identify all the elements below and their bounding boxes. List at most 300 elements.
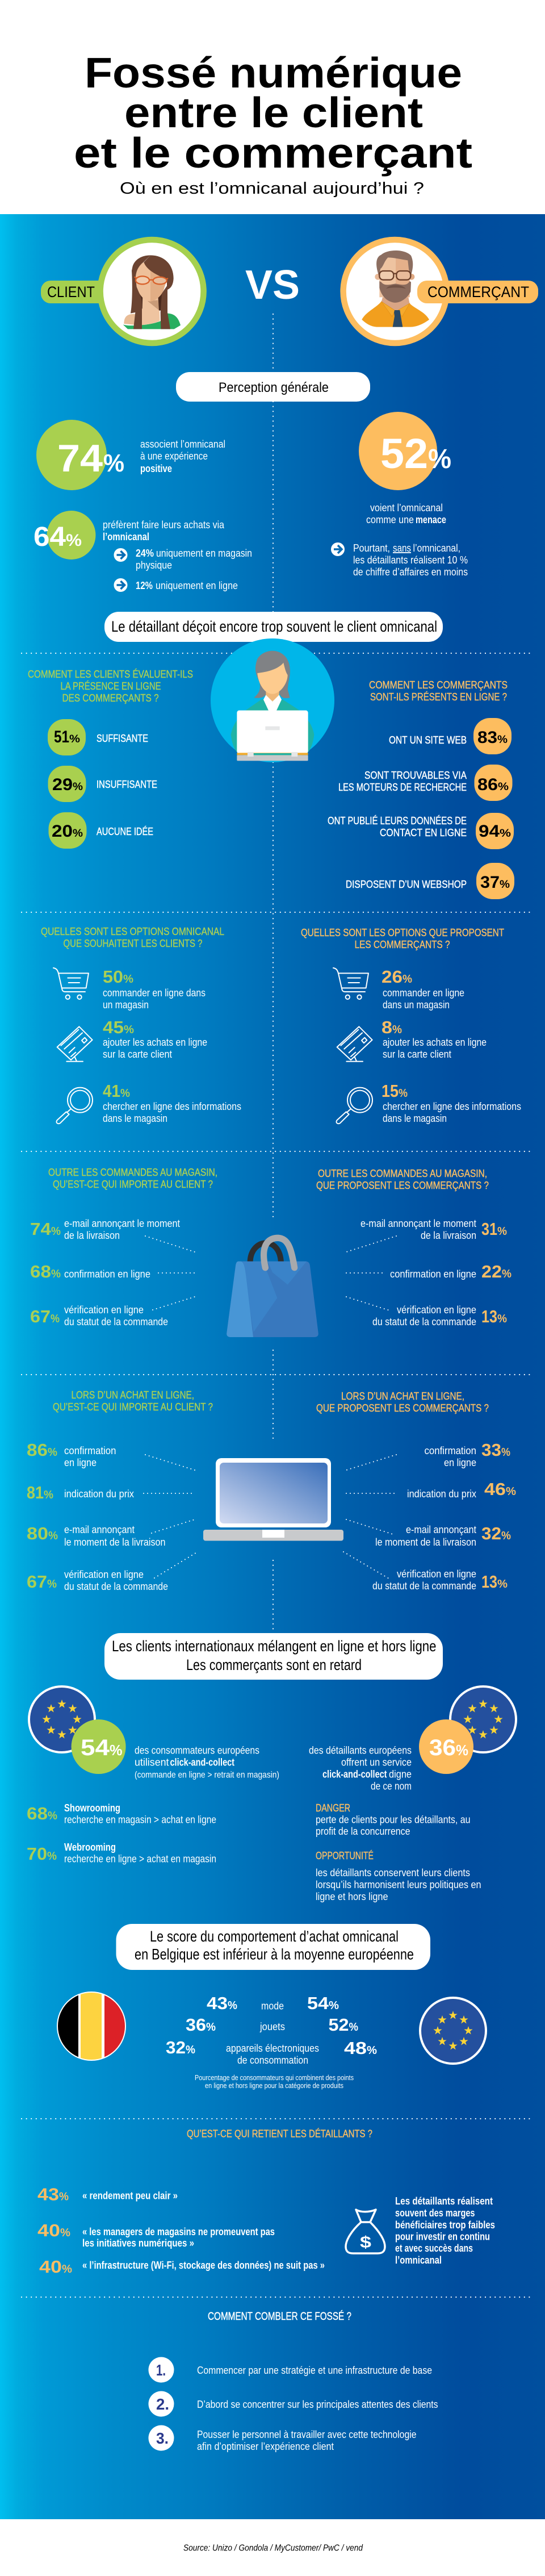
stat: 46% price: indication du prix (407, 1488, 476, 1500)
stat: 31% delivery email: % (497, 1225, 507, 1238)
heading: client evaluation (28, 669, 193, 704)
stat: 13% order status: du statut de la commande (372, 1580, 476, 1592)
heading: client evaluation: COMMENT LES CLIENTS ÉVALUENT-ILS (28, 669, 193, 680)
stat: 40% store managers: les initiatives numériques » (82, 2237, 194, 2249)
panel: retailer obstacles (37, 2185, 495, 2277)
stat: 8% loyalty card: % (392, 1024, 402, 1036)
stat: 46% price (407, 1479, 516, 1500)
badge: 37% webshop (346, 863, 514, 899)
stat: 40% store managers: % (60, 2227, 70, 2239)
text: without omnichannel (353, 542, 468, 578)
text: 12% online: 12% (136, 580, 153, 591)
stat: 67% order status: du statut de la commande (64, 1581, 168, 1592)
step 2: D’abord se concentrer sur les principales attentes des clients (197, 2399, 438, 2410)
stat: 32% delivery email: le moment de la livraison (375, 1537, 476, 1548)
stat: 67% order status: 67 (30, 1306, 51, 1326)
text: low margins: souvent des marges (395, 2207, 475, 2219)
stat: 70% webrooming (27, 1842, 216, 1864)
stat: 22% online confirmation: 22 (481, 1262, 502, 1281)
connector lines to laptop (144, 1455, 398, 1579)
step 3: 3. (156, 2429, 169, 2447)
text: danger: DANGER (316, 1802, 350, 1814)
panel: steps (149, 2357, 438, 2452)
stat: 74% delivery email: 74 (30, 1219, 52, 1239)
icon: magnifier (56, 1088, 93, 1124)
stat: 74% (36, 420, 124, 490)
text: click-and-collect offer: click-and-collect (322, 1769, 387, 1780)
stat: 86% confirmation: en ligne (64, 1457, 97, 1468)
heading: score Belgique: en Belgique est inférieur à la moyenne européenne (135, 1946, 414, 1963)
text: 24% in store (136, 548, 252, 571)
badge: 29% insufficient (48, 766, 157, 802)
stat: 86% confirmation: confirmation (64, 1445, 116, 1456)
stat: 26% order in store: % (403, 973, 412, 986)
stat: 43% unclear return: « rendement peu clair » (82, 2190, 178, 2202)
step 3: afin d’optimiser l’expérience client (197, 2441, 334, 2452)
icon: woman (123, 255, 181, 329)
heading: merchant in-store (316, 1168, 489, 1191)
icon: arrow (114, 548, 127, 562)
icon: loyalty card (337, 1026, 372, 1062)
row: jouets (186, 2015, 358, 2035)
heading: client in-store (48, 1167, 217, 1190)
badge: 51% sufficient: 51 (54, 728, 69, 746)
stat: 67% order status: vérification en ligne (64, 1569, 144, 1580)
row: appareils électroniques: appareils électroniques (226, 2043, 319, 2054)
heading: comment combler: COMMENT COMBLER CE FOSSÉ ? (208, 2311, 351, 2323)
heading: client online (53, 1389, 213, 1413)
stat: 50% order in store: commander en ligne dans (103, 987, 206, 999)
stat: 50% order in store: 50 (103, 967, 123, 987)
source: Source: Unizo / Gondola / MyCustomer/ PwC / vend (183, 2544, 363, 2553)
stat: 50% order in store (103, 967, 206, 1011)
title: Fossé numérique (85, 49, 462, 97)
text: 24% in store: physique (136, 560, 172, 571)
text: opportunity: lorsqu’ils harmonisent leurs politiques en (316, 1879, 481, 1890)
stat: 81% price: % (44, 1489, 53, 1501)
stat: 74% delivery email: de la livraison (64, 1230, 120, 1241)
stat: 68% showrooming (27, 1802, 216, 1826)
section dividers (22, 314, 531, 2297)
badge: 86% search engines: SONT TROUVABLES VIA (364, 770, 467, 781)
icon: magnifier (336, 1088, 372, 1124)
badge: 94% contact data: % (500, 828, 511, 840)
stat: 13% order status: % (497, 1313, 507, 1325)
heading: merchant in-store: OUTRE LES COMMANDES AU MAGASIN, (318, 1168, 487, 1179)
stat: 67% order status: du statut de la commande (64, 1316, 168, 1327)
row: jouets: 52 (328, 2015, 349, 2035)
badge: 83% website: % (497, 734, 508, 746)
panel: online what merchants offer (316, 1391, 516, 1592)
icon: EU flag (420, 1998, 486, 2064)
heading: merchant online: LORS D’UN ACHAT EN LIGNE, (341, 1391, 464, 1402)
badge: 20% no idea: % (73, 828, 83, 840)
heading: merchant online (316, 1391, 489, 1414)
text: without omnichannel: de chiffre d’affaires en moins (353, 566, 468, 578)
stat: 33% confirmation: 33 (481, 1440, 501, 1460)
heading: merchant presence: SONT-ILS PRÉSENTS EN LIGNE ? (370, 691, 507, 703)
row: jouets: % (349, 2021, 358, 2034)
icon: man (362, 250, 429, 327)
stat: 26% order in store: 26 (382, 967, 403, 987)
stat: 74% delivery email (30, 1218, 180, 1241)
heading: clients internationaux: Les clients internationaux mélangent en ligne et hors ligne (112, 1638, 436, 1655)
text: opportunity (316, 1850, 481, 1902)
stat: 54% (72, 1719, 126, 1774)
stat: 80% delivery email: le moment de la livraison (64, 1537, 166, 1548)
stat: 67% order status (27, 1569, 168, 1592)
stat: 41% search info: 41 (103, 1081, 120, 1101)
stat: 67% order status: % (47, 1578, 57, 1590)
heading: clients internationaux: Les commerçants sont en retard (186, 1656, 362, 1673)
stat: 33% confirmation: confirmation (425, 1445, 476, 1456)
badge: 37% webshop: % (500, 879, 510, 891)
stat: 67% order status: 67 (27, 1572, 47, 1592)
stat: 13% order status (372, 1568, 508, 1592)
stat: 64% (33, 511, 95, 560)
text: 24% in store: uniquement en magasin (156, 548, 252, 559)
badge: 29% insufficient: INSUFFISANTE (97, 779, 157, 790)
stat: 31% delivery email: e-mail annonçant le moment (360, 1218, 476, 1229)
badge: 94% contact data: ONT PUBLIÉ LEURS DONNÉES DE (328, 815, 467, 826)
text: 64% caption (103, 519, 225, 542)
stat: 40% store managers: 40 (37, 2220, 60, 2240)
client portrait (41, 240, 204, 343)
row: appareils électroniques: % (367, 2044, 377, 2057)
row: mode: % (329, 1999, 339, 2012)
text: click-and-collect offer: des détaillants européens (309, 1745, 412, 1756)
badge: 86% search engines (338, 765, 512, 801)
panel: merchant presence (328, 679, 514, 899)
stat: 15% search info: chercher en ligne des informations (383, 1101, 521, 1112)
stat: 43% unclear return (37, 2185, 178, 2204)
stat: 40% store managers (37, 2220, 275, 2249)
stat: 64%: % (66, 531, 82, 550)
stat: 22% online confirmation (390, 1262, 512, 1281)
text: note (195, 2073, 354, 2090)
text: 64% caption: l’omnicanal (103, 531, 149, 542)
text: 74% caption: à une expérience (140, 450, 208, 462)
badge: 86% search engines: 86 (477, 775, 498, 794)
heading: client online: QU’EST-CE QUI IMPORTE AU CLIENT ? (53, 1401, 213, 1413)
text: without omnichannel: l’omnicanal, (413, 542, 460, 554)
stat: 40% infrastructure: « l’infrastructure (Wi-Fi, stockage des données) ne suit pas » (82, 2260, 325, 2271)
text: opportunity: ligne et hors ligne (316, 1891, 388, 1902)
panel: in-store what matters to client (30, 1167, 217, 1327)
panel: online what matters to client (27, 1389, 213, 1592)
heading: client in-store: OUTRE LES COMMANDES AU MAGASIN, (48, 1167, 217, 1178)
badge: 83% website: 83 (477, 728, 497, 747)
stat: 43% unclear return: % (59, 2190, 69, 2203)
stat: 13% order status: % (497, 1578, 508, 1590)
stat: 41% search info: % (120, 1087, 130, 1100)
stat: 67% order status: % (51, 1313, 60, 1325)
stat: 86% confirmation (27, 1440, 116, 1468)
row: appareils électroniques: 48 (344, 2038, 367, 2058)
stat: 15% search info: dans le magasin (383, 1113, 447, 1124)
text: low margins: bénéficiaires trop faibles (395, 2219, 495, 2231)
stat: 54%: % (110, 1742, 123, 1759)
stat: 68% online confirmation: 68 (30, 1262, 51, 1281)
text: 74% caption: associent l’omnicanal (140, 439, 225, 450)
icon: money bag: $ (360, 2233, 371, 2252)
text: 52% caption: menace (416, 514, 446, 525)
row: jouets: 36 (186, 2015, 206, 2035)
stat: 41% search info: chercher en ligne des informations (103, 1101, 241, 1112)
stat: 80% delivery email (27, 1523, 166, 1548)
stat: 33% confirmation (425, 1440, 510, 1468)
stat: 13% order status: 13 (481, 1572, 497, 1592)
text: click-and-collect use: utilisent (135, 1756, 169, 1768)
heading: le détaillant déçoit: Le détaillant déçoit encore trop souvent le client omnicanal (111, 618, 437, 635)
row: mode: % (228, 1999, 237, 2012)
text: opportunity: les détaillants conservent leurs clients (316, 1867, 470, 1878)
stat: 31% delivery email: 31 (481, 1219, 497, 1239)
panel: european consumers (27, 1686, 279, 1864)
text: click-and-collect offer: de ce nom (371, 1780, 412, 1792)
text: low margins: pour investir en continu (395, 2231, 490, 2243)
stat: 74% delivery email: % (51, 1225, 61, 1238)
panel: belgium versus europe (57, 1991, 486, 2090)
stat: 32% delivery email: % (501, 1530, 511, 1542)
badge: 51% sufficient (48, 719, 148, 755)
stat: 70% webrooming: Webrooming (64, 1842, 116, 1853)
text: note: en ligne et hors ligne pour la catégorie de produits (205, 2081, 343, 2090)
text: 74% caption: positive (140, 463, 172, 474)
stat: 40% infrastructure (39, 2257, 325, 2277)
text: 52% caption: comme une (366, 514, 414, 525)
text: low margins (395, 2195, 495, 2266)
row: mode: 54 (307, 1993, 329, 2013)
step 3 (149, 2425, 417, 2452)
stat: 45% loyalty card (103, 1017, 207, 1060)
stat: 64%: 64 (33, 522, 66, 552)
text: without omnichannel: les détaillants réalisent 10 % (353, 554, 468, 566)
row: appareils électroniques: % (186, 2044, 195, 2056)
merchant label (417, 281, 538, 303)
stat: 80% delivery email: e-mail annonçant (64, 1524, 135, 1535)
icon: cart (333, 968, 368, 999)
stat: 33% confirmation: en ligne (444, 1457, 476, 1468)
badge: 20% no idea: AUCUNE IDÉE (97, 826, 153, 837)
stat: 74% delivery email: e-mail annonçant le moment (64, 1218, 180, 1229)
stat: 86% confirmation: % (48, 1446, 57, 1459)
stat: 81% price (27, 1483, 134, 1502)
heading: options wanted (41, 926, 224, 949)
step 3: Pousser le personnel à travailler avec cette technologie (197, 2429, 417, 2440)
badge: 83% website: ONT UN SITE WEB (389, 734, 467, 746)
merchant label: COMMERÇANT (427, 283, 529, 300)
heading: client online: LORS D’UN ACHAT EN LIGNE, (72, 1389, 194, 1401)
step 1: 1. (156, 2361, 166, 2379)
stat: 33% confirmation: % (501, 1446, 510, 1459)
icon: loyalty card (57, 1026, 93, 1062)
step 2 (149, 2391, 438, 2416)
stat: 81% price: 81 (27, 1483, 44, 1502)
text: click-and-collect use: (commande en ligne > retrait en magasin) (135, 1770, 279, 1780)
stat: 26% order in store: commander en ligne (383, 987, 464, 999)
heading: options wanted: QUELLES SONT LES OPTIONS OMNICANAL (41, 926, 224, 937)
stat: 52%: % (428, 444, 451, 474)
icon: EU flag (450, 1686, 516, 1752)
icon: shopping bag (227, 1238, 318, 1337)
heading: merchant in-store: QUE PROPOSENT LES COMMERÇANTS ? (316, 1180, 489, 1191)
text: low margins: et avec succès dans (395, 2243, 473, 2254)
heading: client evaluation: DES COMMERÇANTS ? (62, 692, 159, 704)
stat: 68% showrooming: Showrooming (64, 1802, 120, 1814)
stat: 8% loyalty card: ajouter les achats en ligne (383, 1037, 487, 1048)
heading: clients internationaux (104, 1633, 443, 1680)
stat: 13% order status: 13 (481, 1306, 497, 1326)
stat: 52% (359, 412, 451, 490)
stat: 8% loyalty card: sur la carte client (383, 1049, 451, 1060)
stat: 46% price: 46 (484, 1479, 506, 1499)
heading: merchant presence (369, 679, 508, 703)
panel: european retailers (309, 1686, 516, 1902)
title: entre le client (124, 89, 423, 136)
heading: le détaillant déçoit (104, 612, 443, 642)
stat: 32% delivery email (375, 1523, 511, 1548)
row: mode: mode (261, 2001, 284, 2012)
stat: 67% order status: vérification en ligne (64, 1304, 144, 1316)
text: 52% caption: voient l’omnicanal (370, 502, 443, 513)
badge: 51% sufficient: % (69, 733, 80, 745)
stat: 32% delivery email: 32 (481, 1523, 501, 1543)
text: click-and-collect offer: digne (389, 1769, 412, 1780)
icon: money bag (346, 2210, 385, 2253)
text: 24% in store: 24% (136, 548, 154, 559)
stat: 68% online confirmation: confirmation en ligne (64, 1268, 150, 1280)
stat: 68% online confirmation (30, 1262, 150, 1281)
stat: 50% order in store: un magasin (103, 999, 149, 1011)
heading: merchant presence: COMMENT LES COMMERÇANTS (369, 679, 508, 691)
stat: 26% order in store (382, 967, 464, 1011)
text: 52% caption (366, 502, 446, 525)
heading: score Belgique: Le score du comportement d’achat omnicanal (150, 1928, 399, 1945)
stat: 13% order status (372, 1304, 507, 1327)
stat: 70% webrooming: 70 (27, 1844, 47, 1864)
text: click-and-collect use: des consommateurs européens (135, 1745, 259, 1756)
stat: 74%: % (103, 449, 124, 477)
heading: options offered: QUELLES SONT LES OPTIONS QUE PROPOSENT (301, 927, 504, 938)
stat: 45% loyalty card: ajouter les achats en ligne (103, 1037, 207, 1048)
text: click-and-collect use: click-and-collect (170, 1756, 234, 1768)
badge: 86% search engines: % (498, 781, 509, 793)
text: without omnichannel: Pourtant, (353, 542, 390, 554)
heading: qu'est-ce qui retient: QU’EST-CE QUI RETIENT LES DÉTAILLANTS ? (187, 2128, 372, 2139)
stat: 40% infrastructure: 40 (39, 2257, 62, 2277)
stat: 36%: % (456, 1742, 468, 1759)
icon: person at laptop (211, 638, 334, 762)
stat: 41% search info: dans le magasin (103, 1113, 167, 1124)
stat: 36% (419, 1719, 473, 1774)
versus label: VS (245, 262, 300, 308)
icon: cart (53, 968, 89, 999)
panel: options offered by merchants (301, 927, 521, 1124)
stat: 68% online confirmation: % (51, 1268, 61, 1280)
stat: 8% loyalty card (382, 1017, 487, 1060)
text: danger (316, 1802, 470, 1837)
subtitle: Où en est l’omnicanal aujourd’hui ? (120, 179, 424, 198)
stat: 68% showrooming: 68 (27, 1803, 48, 1823)
text: without omnichannel: sans (393, 542, 411, 554)
stat: 46% price: % (506, 1485, 516, 1498)
heading: options offered: LES COMMERÇANTS ? (355, 939, 450, 950)
panel: options wanted by clients (41, 926, 241, 1124)
stat: 8% loyalty card: 8 (382, 1017, 392, 1037)
badge: 29% insufficient: 29 (52, 775, 73, 794)
text: low margins: l’omnicanal (395, 2254, 442, 2266)
stat: 15% search info: % (399, 1087, 408, 1100)
stat: 80% delivery email: % (48, 1530, 58, 1542)
title (74, 49, 472, 177)
badge: 29% insufficient: % (73, 781, 83, 793)
stat: 70% webrooming: % (47, 1850, 57, 1863)
stat: 81% price: indication du prix (64, 1488, 134, 1500)
stat: 32% delivery email: e-mail annonçant (406, 1524, 476, 1535)
client label (41, 281, 109, 303)
stat: 40% store managers: « les managers de magasins ne promeuvent pas (82, 2226, 275, 2237)
stat: 68% showrooming: % (48, 1810, 57, 1822)
text: click-and-collect offer: offrent un service (341, 1756, 412, 1768)
icon: EU flag (29, 1686, 95, 1752)
row: appareils électroniques: 32 (166, 2038, 186, 2057)
icon: Belgian flag (57, 1991, 127, 2061)
step 1 (149, 2357, 432, 2382)
step 1: Commencer par une stratégie et une infrastructure de base (197, 2365, 432, 2376)
panel: client perception (33, 420, 252, 592)
badge: 86% search engines: LES MOTEURS DE RECHERCHE (338, 782, 467, 793)
title: et le commerçant (74, 129, 472, 177)
badge: 37% webshop: DISPOSENT D’UN WEBSHOP (346, 879, 467, 890)
badge: 94% contact data: CONTACT EN LIGNE (380, 827, 467, 838)
stat: 13% order status: du statut de la commande (372, 1316, 476, 1327)
text: 12% online: uniquement en ligne (156, 580, 238, 591)
text: danger: perte de clients pour les détaillants, au (316, 1814, 470, 1826)
stat: 13% order status: vérification en ligne (397, 1568, 476, 1580)
text: click-and-collect offer (309, 1745, 412, 1792)
merchant portrait (343, 240, 538, 343)
stat: 54%: 54 (81, 1735, 110, 1760)
text: opportunity: OPPORTUNITÉ (316, 1850, 374, 1861)
text: danger: profit de la concurrence (316, 1826, 410, 1837)
row: jouets: % (206, 2021, 216, 2034)
step 2: 2. (156, 2395, 169, 2413)
panel: in-store what merchants offer (316, 1168, 512, 1327)
client label: CLIENT (47, 283, 95, 300)
stat: 41% search info (103, 1081, 241, 1124)
text: click-and-collect use (135, 1745, 279, 1780)
text: note: Pourcentage de consommateurs qui combinent des points (195, 2073, 354, 2082)
icon: arrow (331, 542, 345, 556)
stat: 45% loyalty card: 45 (103, 1017, 124, 1037)
row: jouets: jouets (259, 2021, 285, 2032)
stat: 86% confirmation: 86 (27, 1440, 48, 1460)
heading: perception générale (176, 372, 370, 402)
stat: 40% infrastructure: % (62, 2263, 72, 2276)
stat: 26% order in store: dans un magasin (383, 999, 450, 1011)
stat: 15% search info (382, 1081, 521, 1124)
heading: merchant online: QUE PROPOSENT LES COMMERÇANTS ? (316, 1402, 489, 1414)
badge: 20% no idea (49, 812, 153, 849)
text: 74% caption (140, 439, 225, 474)
connector lines to bag (145, 1236, 396, 1310)
heading: options wanted: QUE SOUHAITENT LES CLIENTS ? (64, 938, 202, 949)
panel: client evaluation (28, 669, 193, 849)
badge: 83% website (389, 718, 512, 754)
stat: 31% delivery email: de la livraison (421, 1230, 476, 1241)
stat: 45% loyalty card: % (124, 1024, 134, 1036)
